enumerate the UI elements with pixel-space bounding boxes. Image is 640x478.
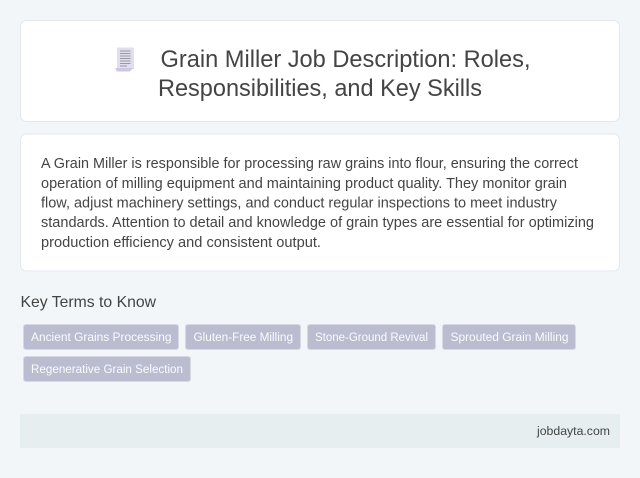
panel: description card bbox=[20, 134, 620, 271]
tag: ancient grains processing: Ancient Grains Processing bbox=[31, 330, 172, 344]
tag: gluten-free milling: Gluten-Free Milling bbox=[194, 330, 293, 344]
tag: sprouted grain milling bbox=[442, 324, 576, 350]
description text: flow, adjust machinery settings, and conduct regular inspections to meet industry bbox=[41, 196, 558, 212]
description text: standards. Attention to detail and knowledge of grain types are essential for optimizing bbox=[41, 215, 594, 231]
title: Grain Miller Job Description: Roles, bbox=[160, 46, 530, 73]
heading: key terms: Key Terms to Know bbox=[20, 294, 156, 311]
icon: document scroll bbox=[116, 48, 134, 72]
tag: regenerative grain selection: Regenerative Grain Selection bbox=[31, 362, 183, 376]
tag: sprouted grain milling: Sprouted Grain Milling bbox=[450, 330, 568, 344]
footer bar bbox=[20, 414, 620, 448]
panel: title card bbox=[20, 20, 620, 122]
description text: production efficiency and consistent output. bbox=[41, 235, 321, 251]
tag: regenerative grain selection bbox=[24, 356, 190, 382]
tag: gluten-free milling bbox=[186, 324, 300, 350]
tag: stone-ground revival: Stone-Ground Revival bbox=[315, 330, 428, 344]
description text: operation of milling equipment and maintaining product quality. They monitor grain bbox=[41, 176, 567, 192]
tag: stone-ground revival bbox=[308, 324, 436, 350]
tag: ancient grains processing bbox=[24, 324, 178, 350]
footer source text: jobdayta.com bbox=[536, 424, 610, 438]
title: Responsibilities, and Key Skills bbox=[158, 75, 482, 102]
description text: A Grain Miller is responsible for processing raw grains into flour, ensuring the correct bbox=[41, 156, 578, 172]
